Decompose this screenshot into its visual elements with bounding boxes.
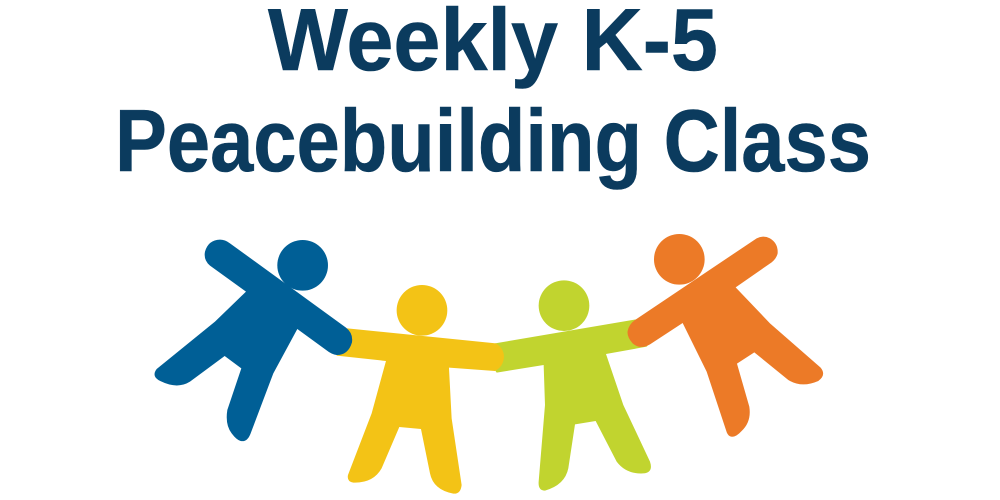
figure: blue child — [155, 240, 352, 441]
figure: yellow child — [337, 285, 504, 494]
title line 2: Peacebuilding Class — [115, 91, 871, 190]
title — [115, 0, 871, 190]
figure: orange child — [628, 234, 823, 437]
figure: green child — [487, 280, 653, 491]
